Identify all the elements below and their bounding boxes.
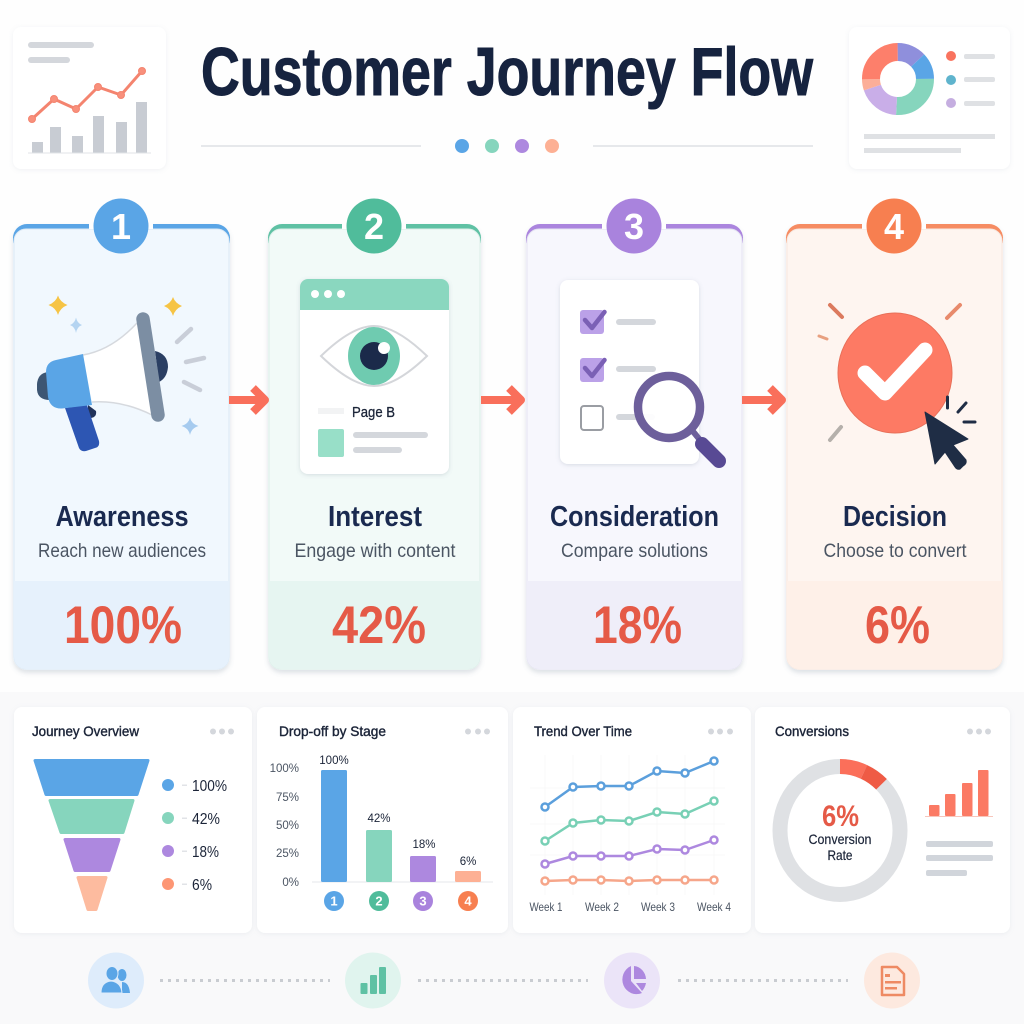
icon: browser with eye: Page B <box>352 404 395 421</box>
bar chart: 25% <box>276 848 299 860</box>
stage description: Compare solutions <box>561 540 708 562</box>
stage name: Interest <box>328 501 422 533</box>
icon: checklist with magnifier <box>560 280 719 464</box>
decorative chart card top left <box>13 27 166 169</box>
step badge 4 <box>866 198 922 254</box>
bar chart: 2 <box>375 894 383 908</box>
icon: browser with eye <box>300 279 449 474</box>
panel: interest <box>268 198 481 670</box>
arrow 1 to 2 <box>229 388 265 412</box>
bar chart: 50% <box>276 820 299 832</box>
stage description: Choose to convert <box>824 540 967 562</box>
connector dots <box>418 979 588 982</box>
bar chart: 18% <box>412 839 436 851</box>
bar chart <box>270 755 493 911</box>
panel: decision <box>786 198 1003 670</box>
step badge 1: 1 <box>111 206 131 247</box>
line chart: Week 4 <box>697 900 731 914</box>
connector dots <box>160 979 330 982</box>
panel heading: Drop-off by Stage <box>279 723 386 739</box>
donut gauge: Rate <box>828 847 853 863</box>
panel: conversions <box>755 707 1010 933</box>
title: Customer Journey Flow <box>201 34 814 110</box>
step badge 2 <box>346 198 402 254</box>
funnel legend: 42% <box>192 811 220 828</box>
funnel legend <box>162 778 227 894</box>
panel heading: Conversions <box>775 723 849 739</box>
icon: check circle with cursor <box>819 305 975 469</box>
icon: megaphone <box>37 296 204 451</box>
decorative donut card top right <box>849 27 1010 169</box>
funnel chart <box>35 760 148 910</box>
panel: awareness <box>13 198 230 670</box>
stage percentage: 42% <box>332 596 426 655</box>
step badge 4: 4 <box>884 206 904 247</box>
stage percentage: 100% <box>64 596 182 655</box>
bar chart: 1 <box>330 894 338 908</box>
donut gauge: Conversion <box>808 831 872 847</box>
donut gauge <box>780 766 900 894</box>
stage name: Awareness <box>56 501 188 533</box>
panel: consideration <box>526 198 743 670</box>
bar chart: 4 <box>464 894 472 908</box>
stage description: Reach new audiences <box>38 540 206 562</box>
line chart: Week 3 <box>641 900 675 914</box>
summary lines <box>926 841 993 876</box>
arrow 2 to 3 <box>481 388 521 412</box>
step badge 1 <box>94 198 148 254</box>
arrow 3 to 4 <box>742 388 782 412</box>
funnel legend: 18% <box>192 844 219 861</box>
line chart: Week 2 <box>585 900 619 914</box>
stage percentage: 18% <box>593 596 682 655</box>
panel heading: Journey Overview <box>32 723 140 739</box>
icon: pie chart <box>604 952 660 1008</box>
panel: drop-off by stage <box>257 707 508 933</box>
line chart: Week 1 <box>530 900 563 914</box>
step badge 2: 2 <box>364 206 384 247</box>
bar chart: 100% <box>319 755 349 767</box>
bar chart: 75% <box>276 792 299 804</box>
stage description: Engage with content <box>294 540 456 562</box>
panel: journey overview <box>14 707 252 933</box>
donut gauge: 6% <box>822 800 859 833</box>
title divider with dots <box>201 139 813 153</box>
menu dots <box>967 728 991 734</box>
icon: users <box>88 952 144 1008</box>
bar chart: 42% <box>367 813 391 825</box>
step badge 3 <box>606 198 662 254</box>
icon: bar chart <box>345 952 401 1008</box>
stage percentage: 6% <box>865 596 930 655</box>
menu dots <box>465 728 490 734</box>
small bar chart <box>925 770 993 817</box>
connector dots <box>678 979 848 982</box>
icon: document <box>864 952 920 1008</box>
funnel legend: 6% <box>192 877 212 894</box>
line chart <box>530 755 731 914</box>
funnel legend: 100% <box>192 778 227 795</box>
bar chart: 100% <box>270 763 299 775</box>
step badge 3: 3 <box>624 206 644 247</box>
bar chart: 3 <box>419 894 427 908</box>
stage name: Consideration <box>550 501 719 533</box>
panel heading: Trend Over Time <box>534 723 632 739</box>
stage name: Decision <box>843 501 947 533</box>
menu dots <box>210 728 234 734</box>
menu dots <box>708 728 733 734</box>
bar chart: 6% <box>460 856 476 868</box>
bar chart: 0% <box>282 877 299 889</box>
panel: trend over time <box>513 707 751 933</box>
